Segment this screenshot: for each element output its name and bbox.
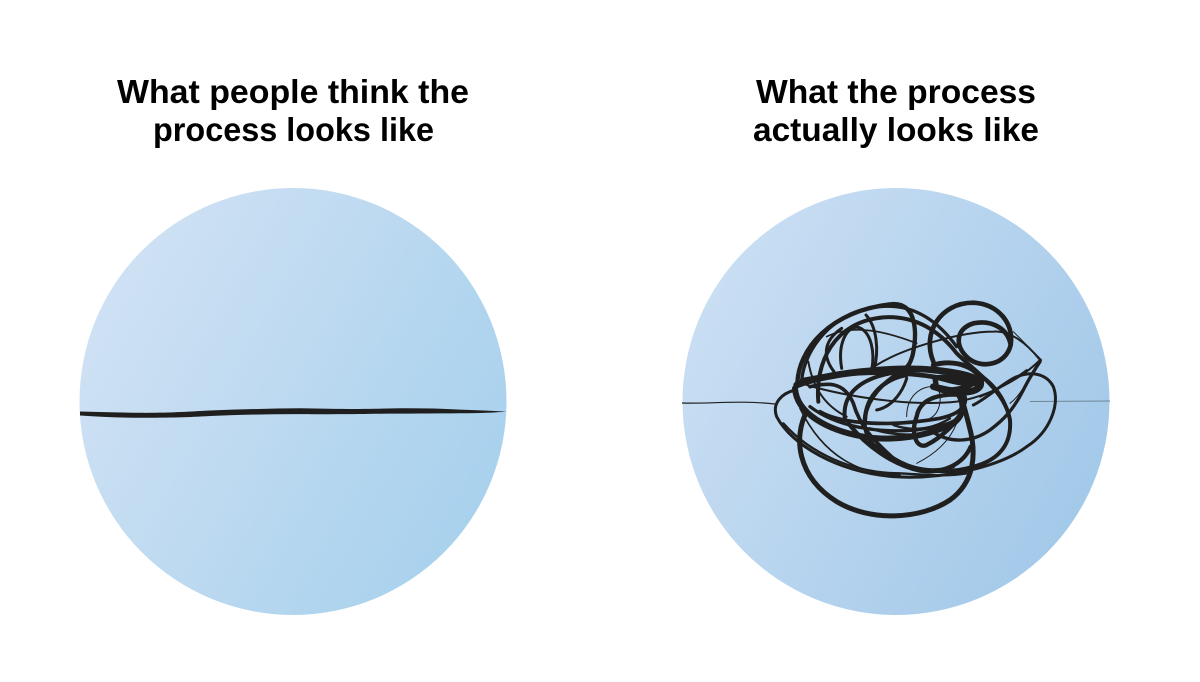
panel: reality <box>682 73 1110 615</box>
straight line stroke <box>80 408 506 418</box>
long thin crossing lines <box>807 332 1040 403</box>
inner left ovals <box>841 327 873 370</box>
heading: what people think <box>117 73 469 148</box>
thin line leaving to right <box>1030 400 1110 402</box>
thick horizontal band <box>797 369 980 392</box>
circle: right blue background <box>682 188 1110 615</box>
large upper left arcs <box>797 304 915 385</box>
heading: what the process actually <box>753 73 1039 148</box>
upper right loops <box>930 303 1011 364</box>
heading: what the process actually: What the process <box>756 73 1036 110</box>
circle: left blue background <box>80 188 506 615</box>
large bottom loop <box>800 393 973 516</box>
inner center loop <box>914 395 963 446</box>
panel: perception <box>80 73 506 615</box>
heading: what people think: What people think the <box>117 73 469 110</box>
thin line entering from left <box>682 402 775 404</box>
heading: what the process actually: actually looks like <box>753 111 1039 148</box>
tangled scribble <box>775 303 1055 516</box>
heading: what people think: process looks like <box>153 111 434 148</box>
wide outer loop <box>775 374 1055 477</box>
